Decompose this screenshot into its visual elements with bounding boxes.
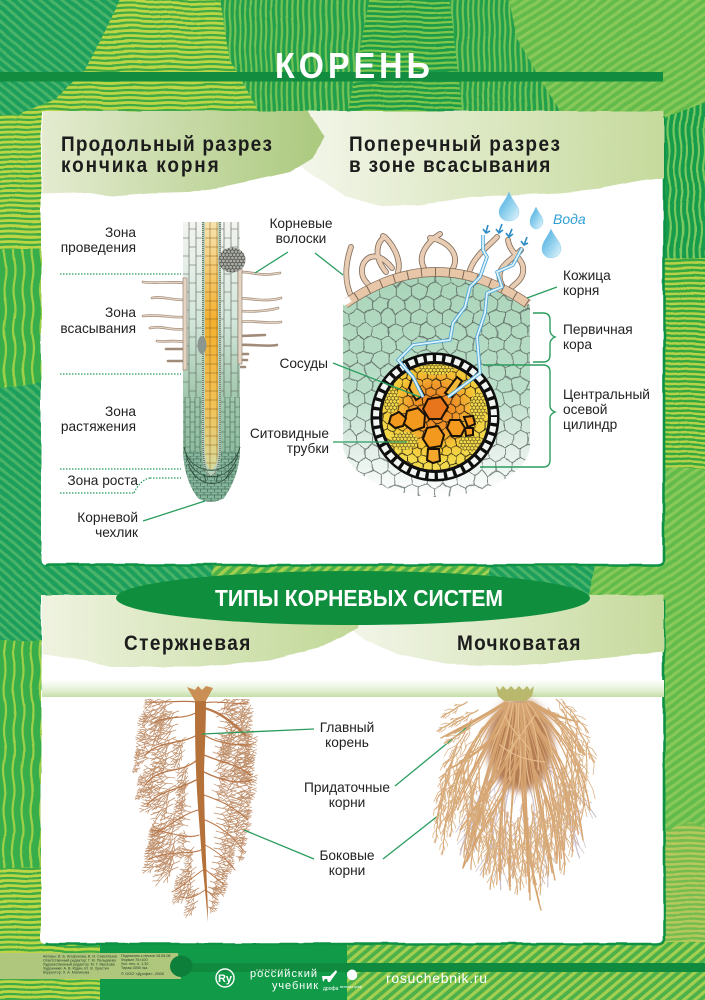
main root: [195, 700, 208, 922]
title: КОРЕНЬ: [275, 46, 430, 86]
footer: brand name: [250, 968, 318, 992]
heading: transverse section: [349, 133, 560, 177]
footer: publisher icons: вентана граф: [340, 985, 362, 989]
zone labels: Зона роста: [67, 473, 138, 488]
footer band: [0, 942, 705, 1000]
footer: authors text: Ответственный редактор: Г. М. Пальдяева: [43, 958, 117, 962]
heading: transverse section: Поперечный разрез: [349, 133, 560, 156]
labels: корня: [563, 283, 599, 298]
root crown: [187, 686, 213, 701]
labels: Первичная: [563, 322, 633, 337]
labels: Придаточные: [304, 780, 390, 795]
twigs: [132, 681, 258, 918]
footer: publisher icons: [322, 969, 362, 992]
heading: longitudinal section: кончика корня: [61, 154, 219, 177]
label: water: Вода: [553, 211, 586, 227]
footer: dark blob: [170, 955, 192, 977]
root body with cells: [183, 222, 240, 502]
labels: осевой: [563, 402, 607, 417]
diagram: longitudinal root section: [60, 222, 281, 540]
footer: logo mark: Ry: [218, 973, 233, 985]
apical meristem arcs: [184, 447, 240, 484]
zone labels: растяжения: [61, 419, 136, 434]
lateral roots: [145, 701, 252, 900]
labels: трубки: [287, 441, 329, 456]
ground strip: [42, 680, 664, 697]
leader: lateral roots right: [383, 815, 439, 859]
footer: logo mark: [216, 969, 234, 987]
footer: authors text: Корректор: Л. А. Малинова: [43, 970, 90, 974]
heading: fibrous: Мочковатая: [457, 632, 581, 655]
central cylinder: [376, 358, 494, 476]
zone labels: [60, 225, 139, 540]
leader: root cap: [143, 501, 205, 521]
water paths: [398, 235, 522, 397]
heading band: transverse section: [300, 111, 664, 206]
xylem vessels: [389, 376, 475, 463]
leader: main root: [202, 729, 314, 734]
footer: authors text: Художники: А. В. Юдин, Ю. В. Христич: [43, 966, 109, 970]
footer: authors text: Тираж 3000 экз.: [121, 966, 148, 970]
side rootlets: [429, 690, 600, 902]
fibrous root system: [429, 686, 605, 910]
core roots: [490, 703, 552, 790]
labels: Сосуды: [279, 356, 328, 371]
water arrows: [483, 224, 528, 245]
dense core: [487, 699, 553, 791]
labels: [304, 720, 390, 878]
footer: authors text: Художественный редактор: М. Г. Мыскова: [43, 962, 116, 966]
zone labels: проведения: [61, 240, 136, 255]
labels: Корневые: [269, 216, 333, 231]
root hairs on skin: [346, 234, 523, 298]
epidermis: [343, 272, 528, 304]
labels: Кожица: [563, 268, 611, 283]
zone labels: Зона: [105, 225, 136, 240]
title bar: [0, 72, 663, 82]
heading band: longitudinal section: [42, 111, 324, 196]
zone labels: всасывания: [60, 321, 136, 336]
leader: adventitious roots: [395, 723, 472, 786]
labels: Центральный: [563, 387, 650, 402]
labels: волоски: [276, 231, 326, 246]
epidermis strips: [183, 268, 242, 370]
labels: цилиндр: [563, 417, 618, 432]
footer: brand name: учебник: [272, 980, 318, 992]
root hairs: [143, 272, 281, 367]
labels: кора: [563, 337, 592, 352]
footer: authors text: Усл. печ. л. 1,30: [121, 962, 148, 966]
cortex: [343, 276, 530, 497]
section banner: ТИПЫ КОРНЕВЫХ СИСТЕМ: [215, 585, 503, 611]
brackets: [480, 313, 555, 467]
taproot system: [132, 681, 472, 922]
footer: brand name: российский: [250, 968, 317, 980]
footer: authors text: Авторы: И. Б. Агафонова, В. И. Сивоглазов: [43, 954, 117, 958]
central cylinder: [202, 222, 221, 476]
heading band: taproot: [42, 595, 365, 667]
labels: [250, 216, 650, 456]
labels: корень: [325, 735, 369, 750]
zone labels: Корневой: [77, 510, 138, 525]
lateral root buds: [198, 248, 246, 354]
heading: longitudinal section: [61, 133, 272, 177]
panel: root structure: [41, 111, 664, 565]
diagram: transverse section: [250, 192, 650, 505]
heading band: fibrous: [345, 595, 664, 666]
zone labels: чехлик: [95, 525, 139, 540]
labels: Боковые: [319, 848, 375, 863]
heading: taproot: Стержневая: [124, 632, 250, 655]
heading: transverse section: в зоне всасывания: [349, 154, 550, 177]
water drops: [499, 192, 561, 258]
section banner: [116, 571, 590, 625]
labels: корни: [329, 863, 365, 878]
leader: lateral roots to label: [244, 830, 314, 859]
footer: imprint box: [0, 953, 181, 979]
zone labels: Зона: [105, 305, 136, 320]
footer: authors text: Подписано к печати 18.08.08: [121, 954, 170, 958]
long roots: [441, 702, 590, 910]
footer: publisher icons: дрофа: [323, 986, 339, 992]
footer: authors text: Формат 70×100: [121, 958, 148, 962]
sieve tubes: [383, 359, 486, 452]
panel: root system types: [41, 571, 664, 944]
heading: longitudinal section: Продольный разрез: [61, 133, 272, 156]
footer: authors text: [43, 954, 170, 976]
leaders: [255, 252, 557, 442]
labels: Главный: [320, 720, 374, 735]
labels: корни: [329, 795, 365, 810]
footer: website: rosuchebnik.ru: [386, 970, 487, 986]
footer: brand name: корпорация: [256, 968, 286, 972]
zone labels: Зона: [105, 404, 136, 419]
footer: authors text: © ООО «Дрофа», 2008: [121, 971, 165, 976]
fine grey rootlets: [447, 742, 605, 891]
labels: Ситовидные: [250, 426, 329, 441]
grass crown: [496, 686, 534, 701]
dotted zone lines: [60, 274, 181, 493]
